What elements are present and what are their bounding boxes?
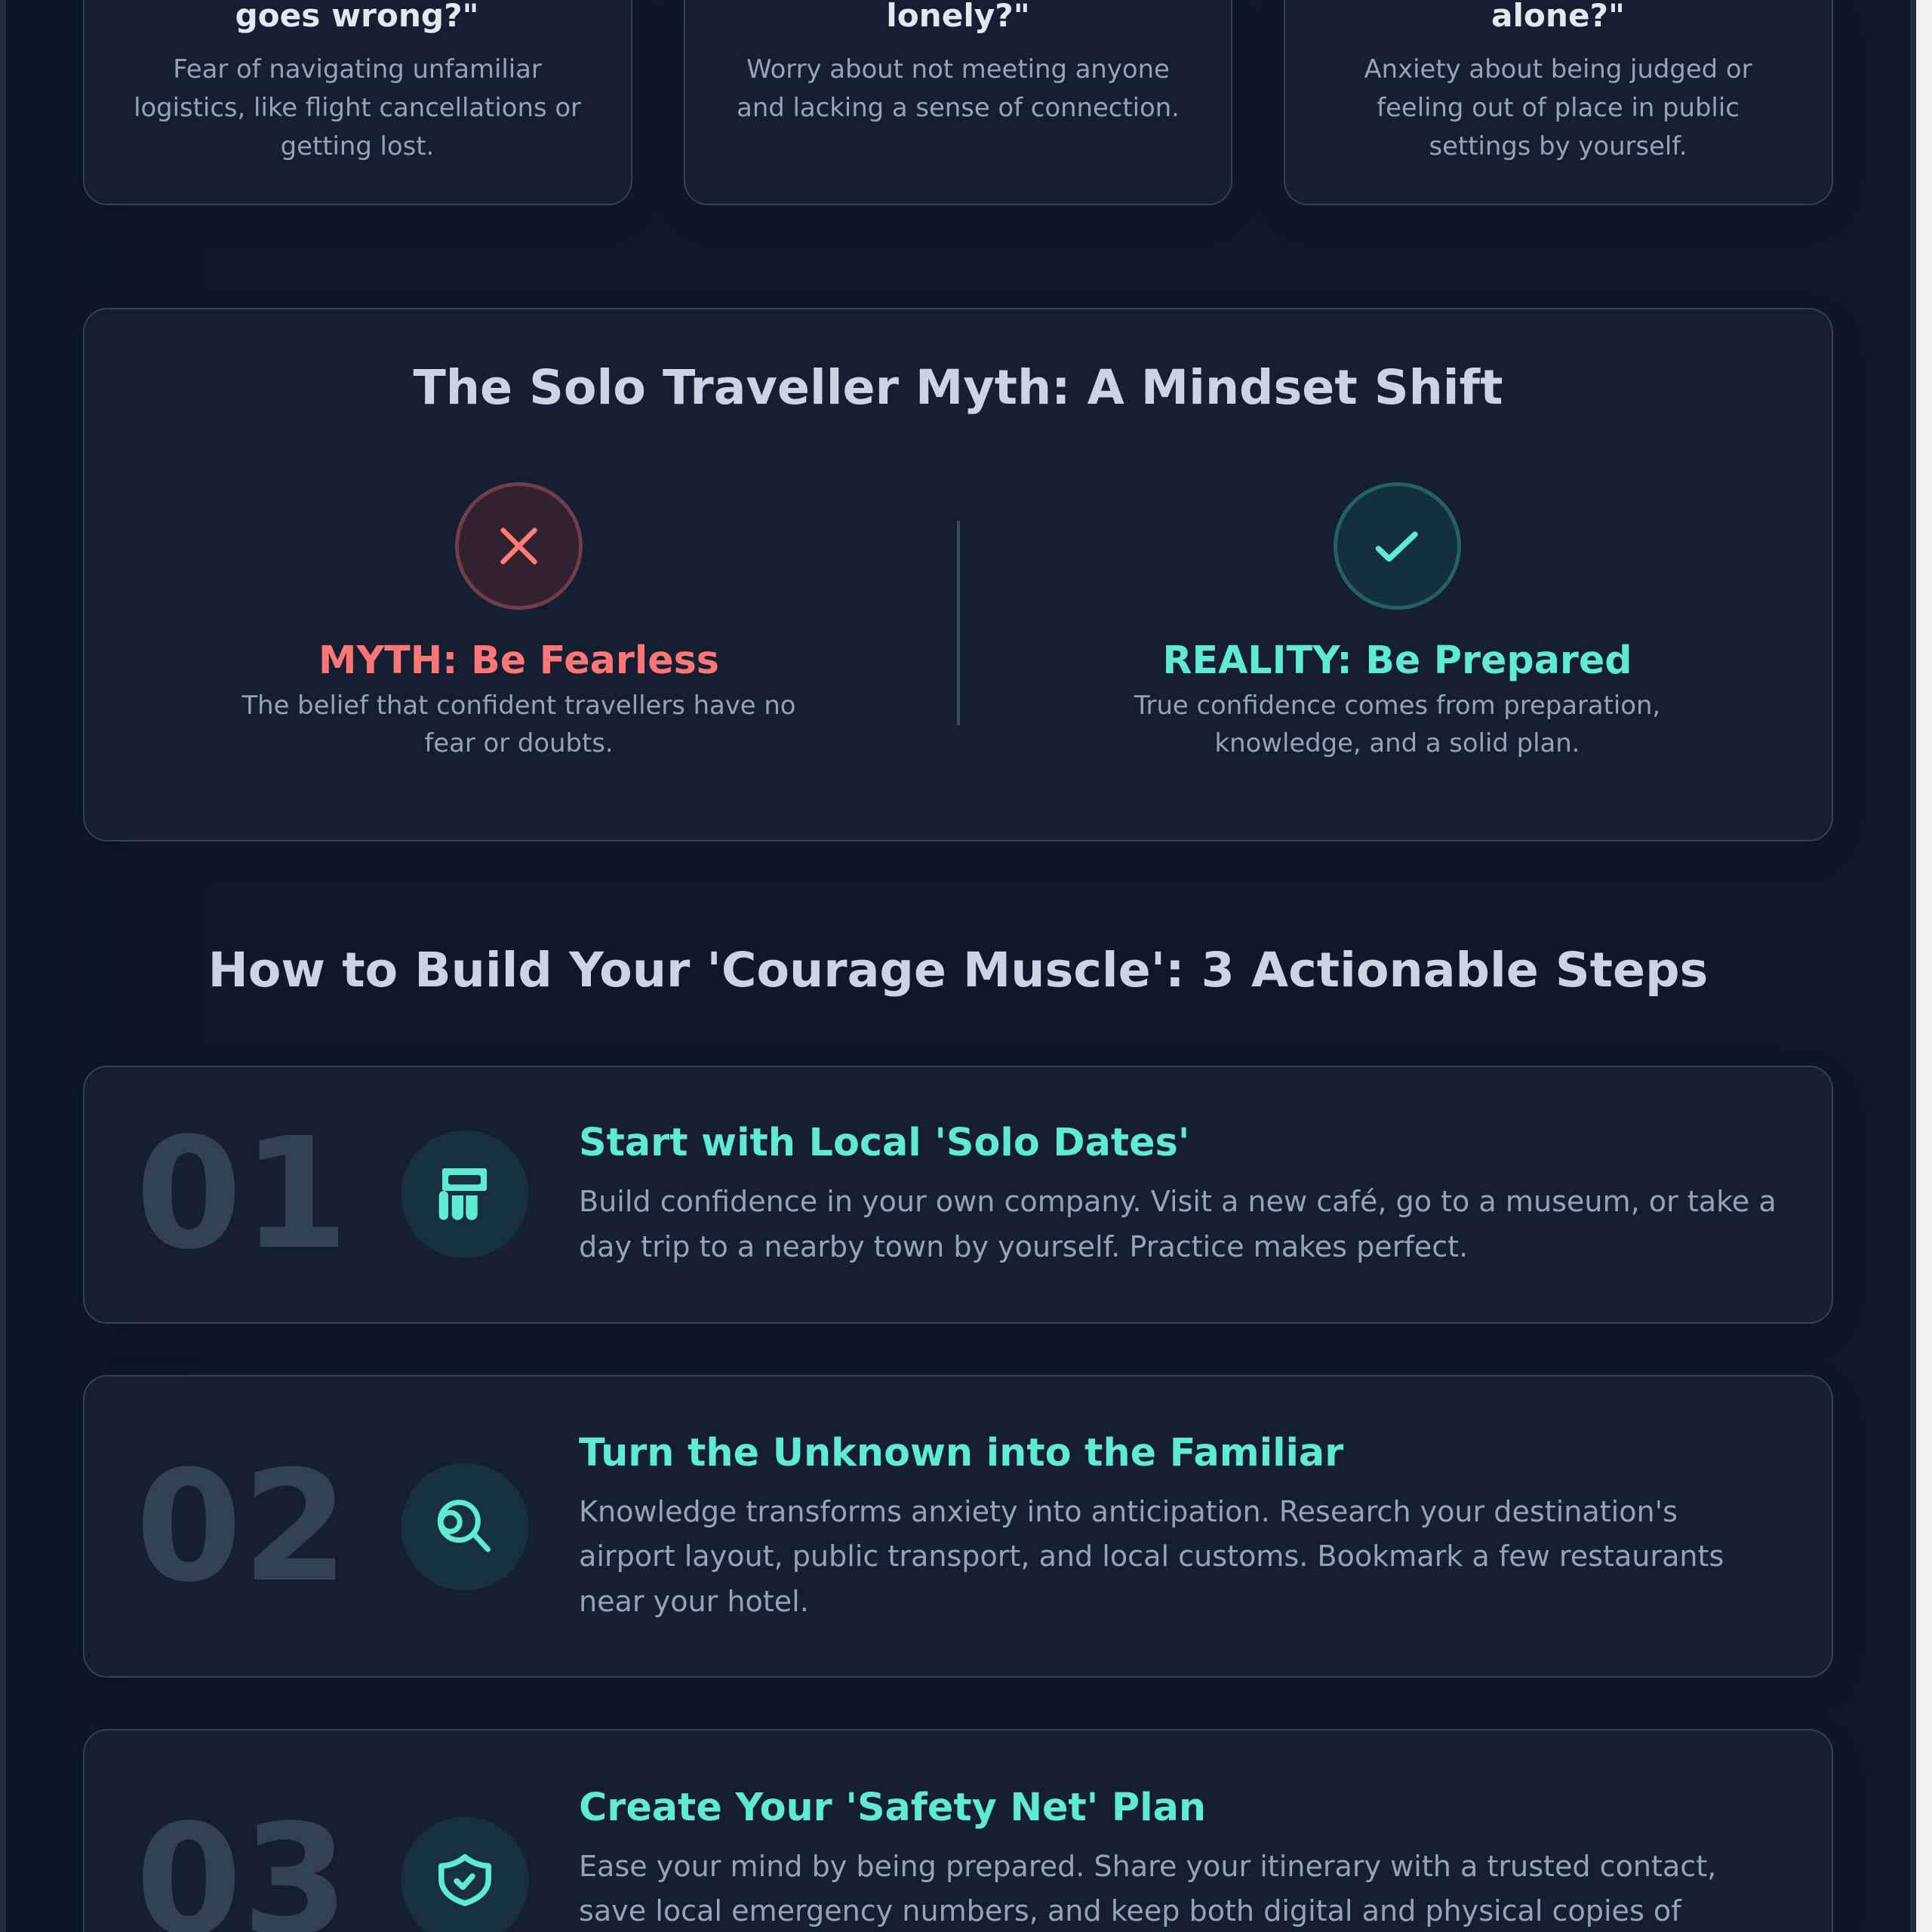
step 1 text: Build confidence in your own company. Visit a new café, go to a museum, or take a xyxy=(579,1185,1777,1218)
myth heading: MYTH: Be Fearless xyxy=(318,638,719,682)
fear card 2 text: Worry about not meeting anyone xyxy=(746,54,1170,84)
panel: fear card 1 xyxy=(83,0,632,205)
icon: step 3 shield xyxy=(401,1817,528,1932)
icon: step 1 cafe xyxy=(401,1131,528,1258)
myth panel title: The Solo Traveller Myth: A Mindset Shift xyxy=(413,359,1503,415)
fear card 2 text xyxy=(737,54,1180,122)
fear card 3 text xyxy=(1364,54,1752,161)
step 3 title: Create Your 'Safety Net' Plan xyxy=(579,1784,1206,1829)
icon: step 2 magnifier xyxy=(401,1463,528,1591)
reality text xyxy=(1134,690,1660,758)
step 3 text: Ease your mind by being prepared. Share your itinerary with a trusted contact, xyxy=(579,1849,1716,1882)
step 2 number: 02 xyxy=(136,1438,349,1616)
icon: myth cross xyxy=(455,482,583,610)
reality heading: REALITY: Be Prepared xyxy=(1162,638,1632,682)
panel: step 1 xyxy=(83,1066,1833,1324)
panel: fear card 2 xyxy=(684,0,1232,205)
panel: fear card 3 xyxy=(1284,0,1833,205)
step 1 text xyxy=(579,1185,1777,1263)
fear card 1 text: getting lost. xyxy=(281,131,434,161)
step 1 title: Start with Local 'Solo Dates' xyxy=(579,1120,1189,1164)
reality text: True confidence comes from preparation, xyxy=(1134,690,1660,720)
panel: step 2 xyxy=(83,1375,1833,1678)
step 2 text: Knowledge transforms anxiety into anticipation. Research your destination's xyxy=(579,1495,1678,1528)
step 2 text xyxy=(579,1495,1724,1618)
reality text: knowledge, and a solid plan. xyxy=(1215,728,1580,758)
step 2 text: airport layout, public transport, and local customs. Bookmark a few restaurants xyxy=(579,1540,1724,1573)
panel: step 3 xyxy=(83,1729,1833,1932)
myth text: The belief that confident travellers have no xyxy=(242,690,795,720)
fear card 3 text: feeling out of place in public xyxy=(1377,93,1740,122)
section heading: How to Build Your 'Courage Muscle': 3 Actionable Steps xyxy=(208,942,1708,998)
fear card 1 text: logistics, like flight cancellations or xyxy=(134,93,581,122)
divider xyxy=(957,521,960,725)
fear card 1 text xyxy=(134,54,581,161)
step 2 title: Turn the Unknown into the Familiar xyxy=(579,1430,1343,1475)
panel: myth and reality xyxy=(83,308,1833,841)
step 3 text: save local emergency numbers, and keep both digital and physical copies of xyxy=(579,1894,1681,1927)
fear card 3 text: Anxiety about being judged or xyxy=(1364,54,1752,84)
myth text: fear or doubts. xyxy=(424,728,614,758)
icon: reality check xyxy=(1334,482,1461,610)
fear card 1 text: Fear of navigating unfamiliar xyxy=(173,54,542,84)
step 1 number: 01 xyxy=(136,1105,349,1283)
fear card 2 text: and lacking a sense of connection. xyxy=(737,93,1180,122)
step 2 text: near your hotel. xyxy=(579,1585,809,1618)
step 1 text: day trip to a nearby town by yourself. Practice makes perfect. xyxy=(579,1230,1468,1263)
fear card 3 text: settings by yourself. xyxy=(1429,131,1687,161)
step 3 text xyxy=(579,1849,1716,1927)
myth text xyxy=(242,690,795,758)
